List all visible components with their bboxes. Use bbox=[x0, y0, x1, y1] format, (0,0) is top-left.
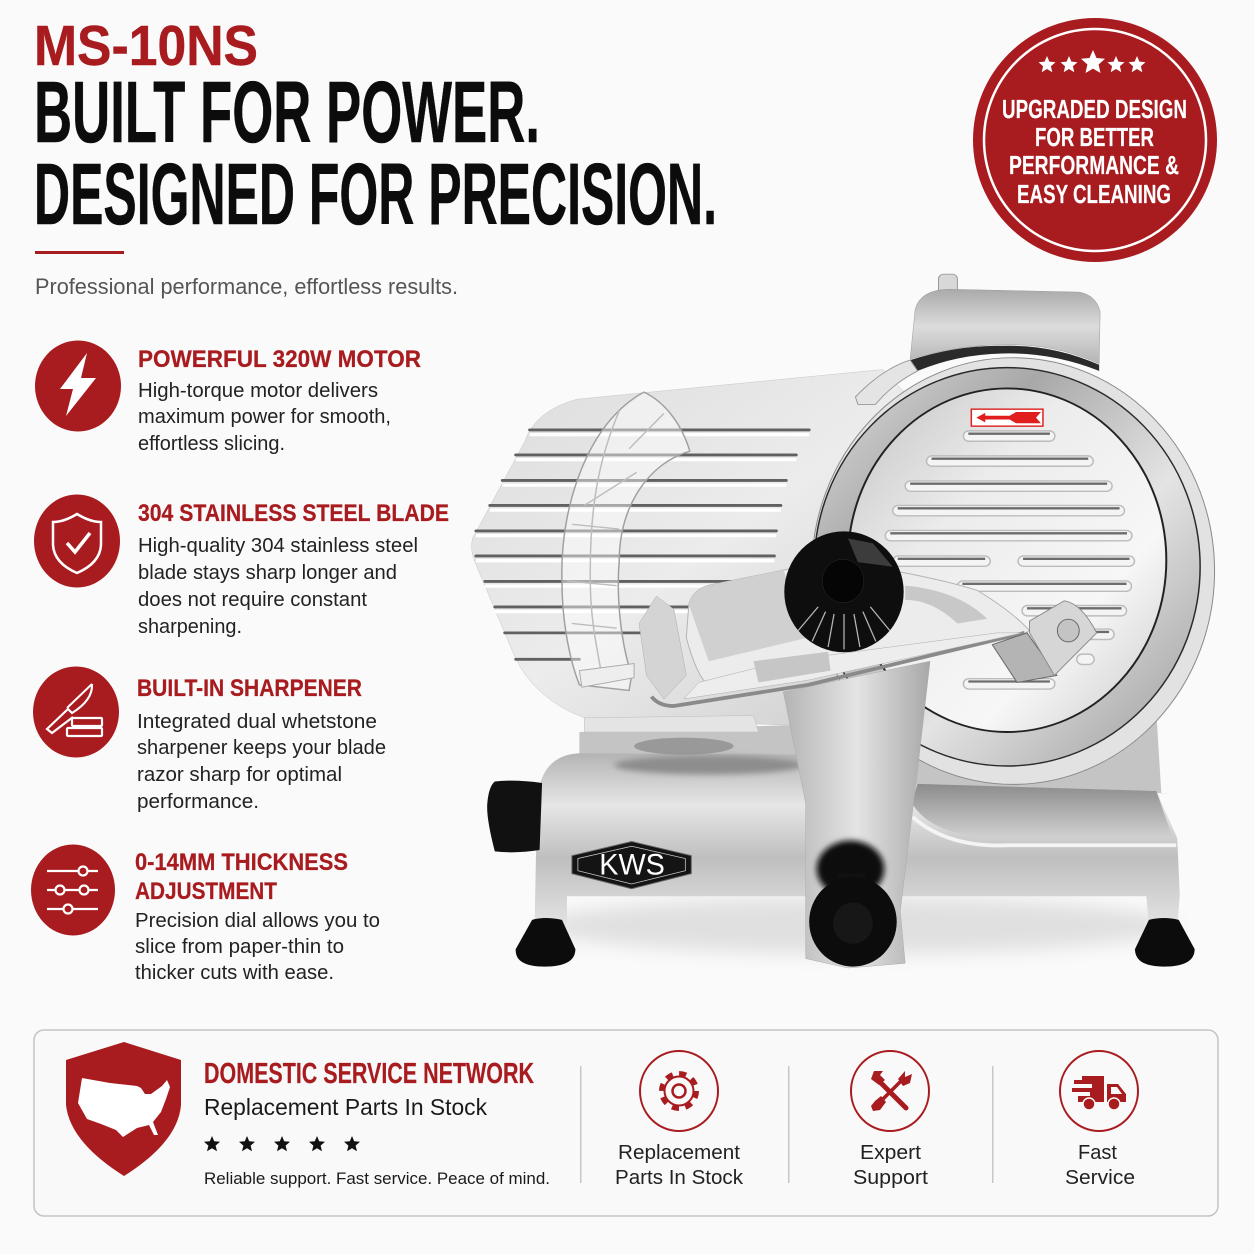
headline line 2: DESIGNED FOR PRECISION. bbox=[34, 146, 717, 243]
icon: sliders bbox=[31, 844, 115, 936]
heading: model and title bbox=[34, 14, 717, 299]
feature: sharpener bbox=[33, 666, 386, 813]
logo: KWS bbox=[572, 842, 691, 889]
blade description bbox=[138, 535, 418, 638]
slicer pedestal bbox=[579, 713, 1171, 793]
column: fast service: Fast bbox=[1078, 1142, 1117, 1164]
column: expert support: Expert bbox=[860, 1142, 921, 1164]
badge text: FOR BETTER bbox=[1035, 122, 1154, 152]
clear food guard bbox=[562, 392, 690, 690]
motor description: High-torque motor delivers bbox=[138, 380, 378, 402]
service text: Reliable support. Fast service. Peace of mind. bbox=[204, 1169, 550, 1188]
red arrow label bbox=[971, 409, 1043, 426]
badge text bbox=[1002, 94, 1187, 209]
blade description: does not require constant bbox=[138, 589, 367, 611]
product illustration: meat slicer bbox=[472, 274, 1215, 968]
icon: knife and whetstones bbox=[33, 666, 119, 758]
badge text: EASY CLEANING bbox=[1017, 179, 1171, 209]
subtitle: Professional performance, effortless results. bbox=[35, 274, 458, 299]
column: expert support bbox=[851, 1051, 929, 1189]
icon: crossed tools bbox=[851, 1051, 929, 1131]
slicer base bbox=[535, 715, 1180, 928]
icon: gear bbox=[640, 1051, 718, 1131]
motor description bbox=[138, 380, 391, 455]
thickness description: slice from paper-thin to bbox=[135, 936, 344, 958]
icon: lightning bolt bbox=[35, 340, 121, 432]
front black knob bbox=[809, 841, 897, 967]
thickness description: thicker cuts with ease. bbox=[135, 962, 334, 984]
model number: MS-10NS bbox=[34, 14, 258, 78]
blade description: sharpening. bbox=[138, 616, 242, 638]
blade description: High-quality 304 stainless steel bbox=[138, 535, 418, 557]
motor description: effortless slicing. bbox=[138, 433, 285, 455]
feature: blade: 304 STAINLESS STEEL BLADE bbox=[138, 500, 449, 527]
central arm bbox=[783, 661, 930, 968]
thickness description bbox=[135, 910, 380, 984]
sharpener description: sharpener keeps your blade bbox=[137, 737, 386, 759]
service text: DOMESTIC SERVICE NETWORK bbox=[204, 1058, 534, 1090]
feature: motor bbox=[35, 340, 421, 455]
blade guard and disc bbox=[812, 358, 1215, 784]
top cap bbox=[855, 274, 1100, 404]
sharpener description: performance. bbox=[137, 791, 259, 813]
food carriage arm bbox=[639, 569, 1097, 706]
icon: shield with USA map bbox=[66, 1042, 181, 1176]
column: expert support: Support bbox=[853, 1167, 928, 1189]
thickness description: Precision dial allows you to bbox=[135, 910, 380, 932]
sharpener description: razor sharp for optimal bbox=[137, 764, 342, 786]
service panel bbox=[34, 1030, 1218, 1216]
feature: thickness adjustment bbox=[31, 844, 380, 984]
service text bbox=[204, 1058, 550, 1188]
badge text: UPGRADED DESIGN bbox=[1002, 94, 1187, 124]
thickness heading: ADJUSTMENT bbox=[135, 878, 277, 905]
service text: Replacement Parts In Stock bbox=[204, 1094, 487, 1120]
motor description: maximum power for smooth, bbox=[138, 406, 391, 428]
badge stars bbox=[1038, 50, 1146, 73]
icon: delivery truck bbox=[1060, 1051, 1138, 1131]
sharpener description bbox=[137, 711, 386, 813]
thickness heading bbox=[135, 849, 348, 905]
blade slots bbox=[885, 431, 1134, 689]
feature: blade bbox=[34, 494, 449, 638]
sharpener description: Integrated dual whetstone bbox=[137, 711, 377, 733]
column: fast service: Service bbox=[1065, 1167, 1135, 1189]
icon: shield check bbox=[34, 494, 120, 588]
column: replacement parts bbox=[615, 1051, 744, 1189]
column: replacement parts: Replacement bbox=[618, 1142, 740, 1164]
blade description: blade stays sharp longer and bbox=[138, 562, 397, 584]
slicer back housing bbox=[472, 370, 957, 725]
icon: left black knob bbox=[487, 781, 542, 852]
logo: KWS: KWS bbox=[599, 849, 665, 881]
rating stars bbox=[204, 1136, 360, 1151]
headline line 1: BUILT FOR POWER. bbox=[34, 64, 540, 161]
badge: upgraded design bbox=[973, 18, 1217, 262]
feature: sharpener: BUILT-IN SHARPENER bbox=[137, 675, 362, 702]
badge text: PERFORMANCE & bbox=[1009, 150, 1179, 180]
column: replacement parts: Parts In Stock bbox=[615, 1167, 744, 1189]
column: fast service bbox=[1060, 1051, 1138, 1189]
feature: motor: POWERFUL 320W MOTOR bbox=[138, 346, 421, 373]
slicer feet bbox=[516, 918, 1195, 967]
thickness heading: 0-14MM THICKNESS bbox=[135, 849, 348, 876]
top black knob bbox=[784, 531, 904, 652]
